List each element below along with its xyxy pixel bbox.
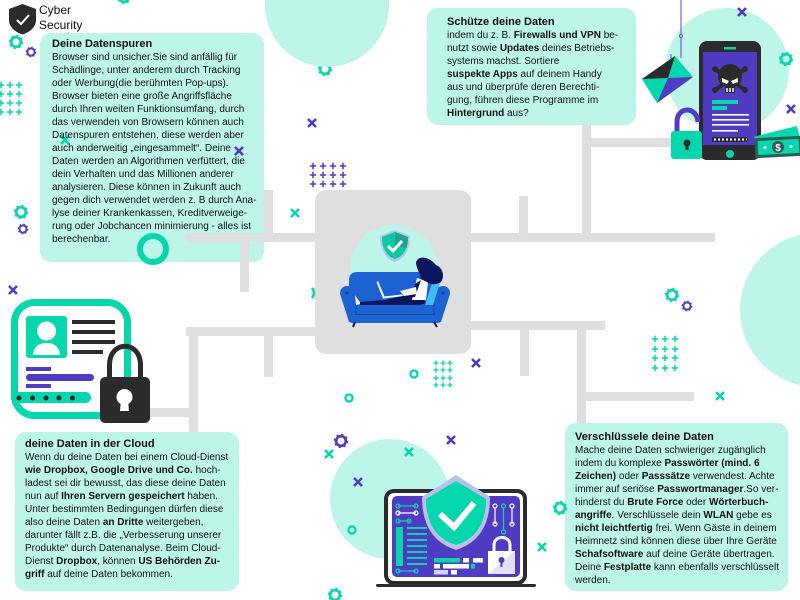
data bars bbox=[434, 558, 483, 574]
text: Deine Datenspuren: Daten werden an Algorithmen verfüttert, die bbox=[52, 156, 245, 167]
text: Schütze deine Daten: aus und überprüfe deren Berechti- bbox=[447, 82, 599, 93]
centre box bbox=[315, 190, 471, 354]
text: Verschlüssele deine Daten: werden. bbox=[575, 575, 611, 586]
text: Deine Datenspuren: Browser sind unsicher.Sie sind anfällig für bbox=[52, 52, 237, 63]
text: Deine Datenspuren: berechenbar. bbox=[52, 234, 110, 245]
text: Verschlüssele deine Daten: Schafsoftware auf deine Geräte übertragen. bbox=[575, 549, 775, 560]
rings bbox=[140, 236, 418, 534]
shield bbox=[422, 475, 490, 550]
text: Verschlüssele deine Daten: indem du komplexe Passwörter (mind. 6 bbox=[575, 458, 760, 469]
circuit right bbox=[493, 504, 514, 526]
plus grid: teal right bbox=[652, 336, 678, 371]
text: deine Daten in der Cloud: nun auf Ihren Servern gespeichert haben. bbox=[25, 491, 218, 502]
text: deine Daten in der Cloud: wie Dropbox, Google Drive und Co. hoch- bbox=[25, 465, 221, 476]
icon: skull and crossbones bbox=[712, 64, 748, 93]
panel: deine Daten in der Cloud bbox=[15, 432, 239, 591]
background circle: phone bbox=[665, 8, 789, 132]
text: Verschlüssele deine Daten: immer auf seriöse Passwortmanager.So ver- bbox=[575, 484, 778, 495]
text: Schütze deine Daten: suspekte Apps auf deinem Handy bbox=[447, 69, 602, 80]
gear sliver beside centre box bbox=[312, 288, 314, 298]
phone bbox=[699, 41, 761, 160]
text: deine Daten in der Cloud: Wenn du deine Daten bei einem Cloud-Dienst bbox=[25, 452, 228, 463]
text: Schütze deine Daten: nutzt sowie Updates deines Betriebs- bbox=[447, 43, 614, 54]
text: Deine Datenspuren: auch anderweitig „eingesammelt“. Deine bbox=[52, 143, 231, 154]
text: deine Daten in der Cloud bbox=[25, 438, 228, 580]
text: Deine Datenspuren: oder Werbung(die berühmten Pop-ups). bbox=[52, 78, 229, 89]
panel: Schütze deine Daten bbox=[427, 8, 636, 125]
text: Deine Datenspuren: rung oder Jobchancen minimierung - alles ist bbox=[52, 221, 251, 232]
logo: shield icon bbox=[9, 4, 36, 34]
text: deine Daten in der Cloud: deine Daten in der Cloud bbox=[25, 438, 155, 450]
cash bbox=[754, 126, 800, 158]
text: Verschlüssele deine Daten bbox=[575, 431, 779, 586]
woman bbox=[355, 258, 443, 305]
text: deine Daten in der Cloud: Unter bestimmten Bedingungen dürfen diese bbox=[25, 504, 223, 515]
plus grid: purple centre bbox=[310, 163, 346, 187]
text: Verschlüssele deine Daten: Mache deine Daten schwieriger zugänglich bbox=[575, 445, 766, 456]
gears: purple bbox=[18, 47, 692, 447]
text: deine Daten in der Cloud: Dienst Dropbox, können US Behörden Zu- bbox=[25, 556, 220, 567]
illustration: laptop with shield bbox=[376, 475, 536, 587]
envelope bbox=[642, 56, 693, 103]
text: Deine Datenspuren: lyse deiner Krankenkassen, Kreditverweige- bbox=[52, 208, 247, 219]
sofa bbox=[340, 272, 450, 327]
text: Schütze deine Daten: gung, führen diese Programme im bbox=[447, 95, 598, 106]
cross marks: teal bbox=[61, 136, 724, 551]
panel: Deine Datenspuren bbox=[40, 33, 264, 262]
cash: $ bbox=[775, 143, 781, 154]
circuit left bbox=[396, 504, 418, 573]
text: Verschlüssele deine Daten: hinderst du Brute Force oder Wörterbuch- bbox=[575, 497, 768, 508]
connector lines bbox=[150, 125, 715, 432]
text: Deine Datenspuren: Browser bieten eine große Angriffsfläche bbox=[52, 91, 232, 102]
text: Deine Datenspuren: Deine Datenspuren bbox=[52, 38, 152, 50]
background circle: right bbox=[740, 233, 800, 387]
text: Verschlüssele deine Daten: nicht leichtfertig frei. Wenn Gäste in deinem bbox=[575, 523, 777, 534]
illustration: ID card with padlock bbox=[11, 302, 150, 423]
text: Schütze deine Daten: systems machst. Sortiere bbox=[447, 56, 559, 67]
text: Deine Datenspuren: analysieren. Diese können in Zukunft auch bbox=[52, 182, 241, 193]
text: Verschlüssele deine Daten: Verschlüssele deine Daten bbox=[575, 431, 714, 443]
logo text: Cyber bbox=[39, 3, 71, 17]
text: Schütze deine Daten bbox=[447, 16, 618, 119]
small padlock bbox=[488, 538, 515, 574]
text: Schütze deine Daten: Hintergrund aus? bbox=[447, 108, 529, 119]
text: deine Daten in der Cloud: griff auf deine Daten bekommen. bbox=[25, 569, 173, 580]
text: Deine Datenspuren: durch Ihren weiten Funktionsumfang, durch bbox=[52, 104, 244, 115]
text: deine Daten in der Cloud: also deine Daten an Dritte weitergeben, bbox=[25, 517, 203, 528]
gear behind top circle bbox=[319, 63, 331, 75]
background circle: top centre bbox=[265, 0, 389, 67]
panel: Verschlüssele deine Daten bbox=[565, 423, 788, 591]
cross marks: purple bbox=[9, 8, 795, 486]
text: Deine Datenspuren: dein Verhalten und das Millionen anderer bbox=[52, 169, 234, 180]
text: Deine Datenspuren: gegen dich verwendet werden z. B durch Ana- bbox=[52, 195, 257, 206]
padlock dark bbox=[100, 346, 150, 423]
logo text bbox=[39, 3, 82, 32]
text: Verschlüssele deine Daten: Zeichen) oder Passsätze verwendest. Achte bbox=[575, 471, 775, 482]
illustration: woman on sofa with shield bbox=[340, 225, 450, 327]
text: Deine Datenspuren: das verwenden von Browsern können auch bbox=[52, 117, 244, 128]
text: deine Daten in der Cloud: darunter fällt z.B. die „Verbesserung unserer bbox=[25, 530, 221, 541]
text: Schütze deine Daten: Schütze deine Daten bbox=[447, 16, 555, 28]
text: Deine Datenspuren: Datenspuren entstehen, diese werden aber bbox=[52, 130, 244, 141]
text: deine Daten in der Cloud: Produkte“ durch Datenanalyse. Beim Cloud- bbox=[25, 543, 221, 554]
illustration: phone with phishing mail, lock and cash bbox=[642, 0, 800, 160]
photo bbox=[26, 316, 67, 358]
logo text: Security bbox=[39, 18, 82, 32]
fishing line bbox=[671, 0, 681, 63]
plus grid: teal left bbox=[0, 82, 22, 115]
padlock teal bbox=[671, 110, 702, 159]
text: Deine Datenspuren: Schädlinge, unter anderem durch Tracking bbox=[52, 65, 240, 76]
plus grid: teal centre bbox=[433, 360, 453, 388]
text: Verschlüssele deine Daten: Heimnetz sind können diese über Ihre Geräte bbox=[575, 536, 777, 547]
text: Schütze deine Daten: indem du z. B. Firewalls und VPN be- bbox=[447, 30, 618, 41]
text: Verschlüssele deine Daten: Deine Festplatte kann ebenfalls verschlüsselt bbox=[575, 562, 779, 573]
background circle: laptop bbox=[330, 439, 450, 559]
text: Verschlüssele deine Daten: angriffe. Verschlüssele dein WLAN gebe es bbox=[575, 510, 772, 521]
text: Deine Datenspuren bbox=[52, 38, 257, 245]
text: deine Daten in der Cloud: ladest sei dir bewusst, das diese deine Daten bbox=[25, 478, 226, 489]
icon: shield bbox=[380, 230, 410, 262]
